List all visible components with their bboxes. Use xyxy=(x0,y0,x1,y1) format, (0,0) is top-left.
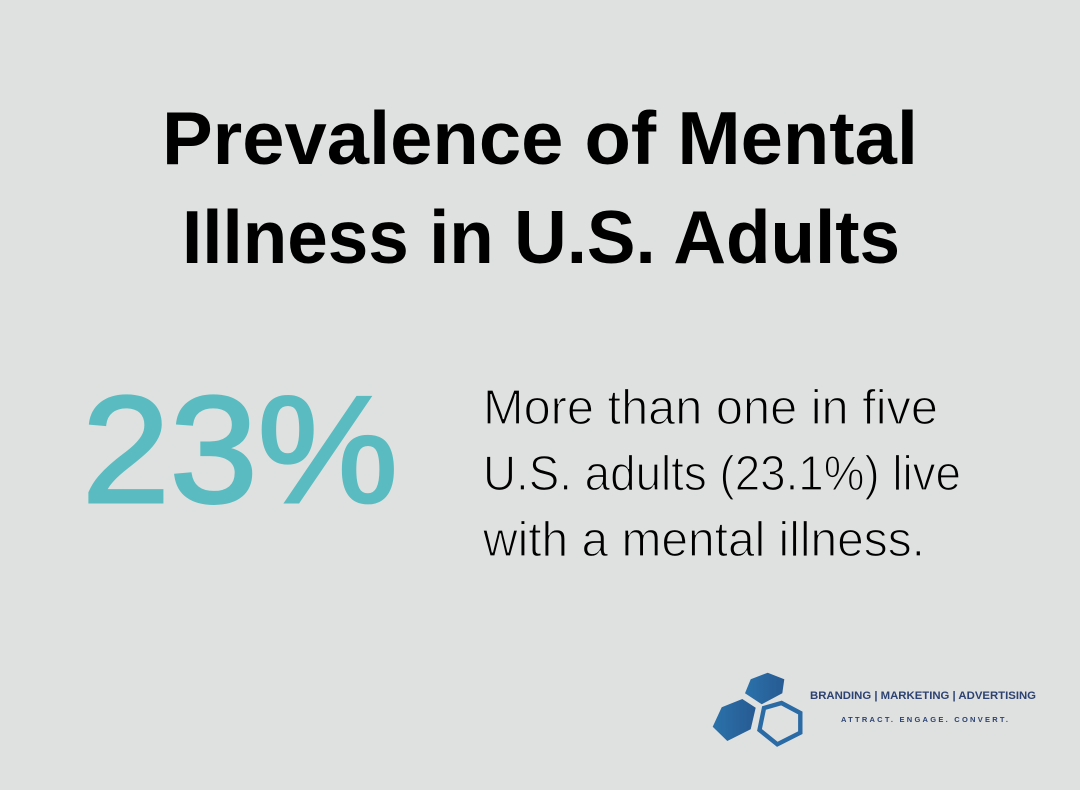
icon: hexagon left xyxy=(713,699,756,741)
title: Illness in U.S. Adults xyxy=(182,195,900,279)
logo slogan: ATTRACT. ENGAGE. CONVERT. xyxy=(841,715,1008,724)
big statistic: 23%: 23% xyxy=(82,365,398,535)
logo xyxy=(713,673,1036,744)
description text xyxy=(482,380,961,567)
icon: hexagon outline xyxy=(760,703,800,744)
title: Prevalence of Mental xyxy=(162,96,918,180)
icon: hexagon top xyxy=(745,673,784,704)
logo tagline: BRANDING | MARKETING | ADVERTISING xyxy=(810,690,1036,702)
description text: More than one in five xyxy=(483,380,938,435)
description text: U.S. adults (23.1%) live xyxy=(483,446,961,501)
title xyxy=(162,96,918,279)
description text: with a mental illness. xyxy=(482,512,925,567)
